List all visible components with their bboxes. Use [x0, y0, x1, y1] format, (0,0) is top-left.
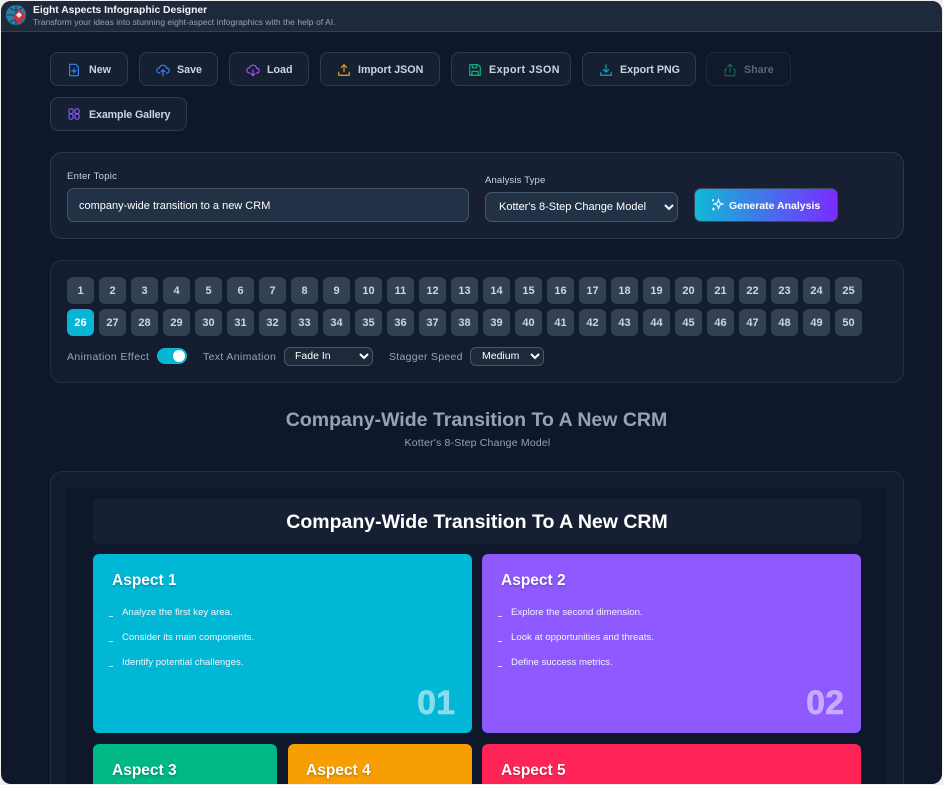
number button grid: 14	[490, 285, 503, 297]
select: stagger speed	[470, 347, 544, 366]
infographic canvas	[67, 488, 887, 785]
button: Export PNG: Export PNG	[620, 64, 680, 76]
button: Load	[229, 52, 309, 86]
app subtitle: Transform your ideas into stunning eight-aspect infographics with the help of AI.	[33, 17, 336, 27]
icon: app logo	[6, 5, 26, 25]
button: Example Gallery	[50, 97, 187, 131]
topic input	[67, 188, 469, 222]
number button grid: 22	[746, 285, 759, 297]
number button grid: 26	[74, 317, 87, 329]
number button grid: 2	[109, 285, 116, 297]
number button grid: 16	[554, 285, 567, 297]
number button grid: 21	[714, 285, 727, 297]
toggle: animation effect	[157, 348, 187, 364]
card: Aspect 1: Identify potential challenges.	[122, 657, 243, 668]
number button grid: 42	[586, 317, 599, 329]
card: Aspect 2: 02	[806, 684, 844, 722]
label: Animation Effect: Animation Effect	[67, 351, 149, 363]
number button grid: 19	[650, 285, 663, 297]
select: stagger speed: Medium	[482, 350, 519, 362]
button: Import JSON	[320, 52, 440, 86]
number button grid: 18	[618, 285, 631, 297]
number button grid: 20	[682, 285, 695, 297]
card: Aspect 2: Look at opportunities and threats.	[511, 632, 654, 643]
number button grid: 34	[330, 317, 343, 329]
number button grid: 47	[746, 317, 759, 329]
number button grid: 9	[333, 285, 340, 297]
panel: template picker and animation controls	[50, 260, 904, 383]
number button grid: 35	[362, 317, 375, 329]
number button grid: 3	[141, 285, 148, 297]
number button grid: 30	[202, 317, 215, 329]
number button grid: 39	[490, 317, 503, 329]
number button grid: 40	[522, 317, 535, 329]
card: Aspect 5: Aspect 5	[501, 762, 566, 779]
select: analysis type: Kotter's 8-Step Change Model	[499, 201, 646, 213]
number button grid: 11	[395, 285, 406, 297]
card: Aspect 1: Consider its main components.	[122, 632, 254, 643]
number button grid: 7	[269, 285, 276, 297]
button: Save	[139, 52, 218, 86]
label: Text Animation: Text Animation	[203, 351, 276, 363]
number button grid: 27	[106, 317, 119, 329]
number button grid: 31	[234, 317, 247, 329]
number button grid: 4	[173, 285, 180, 297]
card: Aspect 2: Define success metrics.	[511, 657, 613, 668]
number button grid: 25	[842, 285, 855, 297]
button: Load: Load	[267, 64, 293, 76]
card: Aspect 4	[288, 744, 472, 785]
number button grid: 29	[170, 317, 183, 329]
card: Aspect 1: Aspect 1	[112, 572, 177, 589]
button: New: New	[89, 64, 111, 76]
card: Aspect 1	[93, 554, 472, 733]
topic input: company-wide transition to a new CRM	[79, 200, 270, 212]
number button grid: 13	[458, 285, 471, 297]
label: Enter Topic: Enter Topic	[67, 171, 117, 182]
button: Save: Save	[177, 64, 202, 76]
number button grid: 8	[301, 285, 308, 297]
select: text animation: Fade In	[295, 350, 331, 362]
number button grid	[67, 277, 862, 336]
infographic title bar	[93, 499, 861, 544]
number button grid: 41	[554, 317, 567, 329]
page subheading: Kotter's 8-Step Change Model	[405, 437, 550, 449]
number button grid: 38	[458, 317, 471, 329]
label: Analysis Type: Analysis Type	[485, 175, 545, 186]
button: Generate Analysis	[694, 188, 838, 222]
number button grid: 15	[522, 285, 535, 297]
icon: sparkles	[712, 198, 724, 210]
number button grid: 17	[586, 285, 599, 297]
select: text animation	[284, 347, 373, 366]
card: Aspect 2	[482, 554, 861, 733]
number button grid: 48	[778, 317, 791, 329]
number button grid: 44	[650, 317, 663, 329]
card: Aspect 1: 01	[417, 684, 455, 722]
number button grid: 12	[426, 285, 439, 297]
page heading: Company-Wide Transition To A New CRM	[286, 409, 667, 431]
number button grid: 50	[842, 317, 855, 329]
number button grid: 36	[394, 317, 407, 329]
number button grid: 6	[237, 285, 244, 297]
card: Aspect 4: Aspect 4	[306, 762, 371, 779]
panel: topic form	[50, 152, 904, 239]
card: Aspect 2: Explore the second dimension.	[511, 607, 643, 618]
number button grid: 1	[77, 285, 84, 297]
button: Export JSON: Export JSON	[489, 64, 560, 76]
number button grid: 37	[426, 317, 439, 329]
number button grid: 28	[138, 317, 151, 329]
card: Aspect 3: Aspect 3	[112, 762, 177, 779]
number button grid: 46	[714, 317, 727, 329]
card: Aspect 3	[93, 744, 277, 785]
button: New	[50, 52, 128, 86]
number button grid: 32	[266, 317, 279, 329]
number button grid: 23	[778, 285, 791, 297]
label: Stagger Speed: Stagger Speed	[389, 351, 463, 363]
number button grid: 45	[682, 317, 695, 329]
button: Export PNG	[582, 52, 696, 86]
button: Share (disabled)	[706, 52, 791, 86]
button label: Generate Analysis	[729, 200, 820, 212]
number button grid: 5	[205, 285, 212, 297]
number button grid: 33	[298, 317, 311, 329]
button: Export JSON	[451, 52, 571, 86]
header bar	[0, 0, 943, 32]
button: Import JSON: Import JSON	[358, 64, 423, 76]
app title: Eight Aspects Infographic Designer	[33, 5, 207, 16]
number button grid: 49	[810, 317, 823, 329]
number button grid: 43	[618, 317, 631, 329]
number button grid: 24	[810, 285, 823, 297]
select: analysis type	[485, 192, 678, 222]
infographic title: Company-Wide Transition To A New CRM	[286, 511, 668, 533]
card: Aspect 1: Analyze the first key area.	[122, 607, 233, 618]
button: Example Gallery: Example Gallery	[89, 109, 170, 121]
card: Aspect 5	[482, 744, 861, 785]
card: Aspect 2: Aspect 2	[501, 572, 566, 589]
number button grid: 10	[362, 285, 375, 297]
panel: infographic frame	[50, 471, 904, 785]
button: Share (disabled): Share	[744, 64, 774, 76]
